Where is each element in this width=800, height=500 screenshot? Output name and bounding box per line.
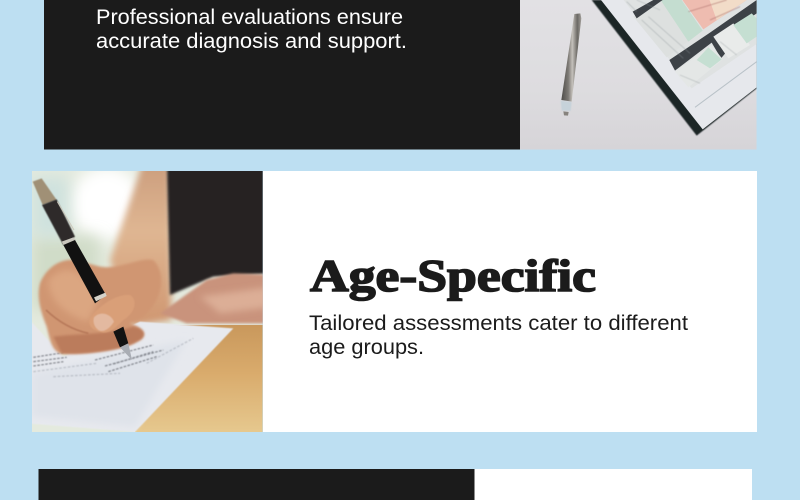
panel: age-specific (27, 150, 757, 432)
printed text lines (33, 345, 163, 372)
panel: next section, cropped (38, 469, 752, 500)
pen (33, 178, 57, 205)
white text panel (263, 171, 757, 432)
white panel (474, 469, 752, 500)
heading: Age-Specific: Age-Specific (310, 250, 596, 301)
hand (39, 259, 161, 354)
text panel: black background (44, 0, 520, 150)
body text: age-specific: Tailored assessments cater to different (309, 312, 688, 335)
panel: professional evaluations (44, 0, 760, 150)
paper sheet (27, 317, 233, 432)
black panel (38, 469, 474, 500)
body text: professional evaluations: Professional evaluations ensure (96, 6, 403, 29)
body text: age-specific: age groups. (309, 336, 424, 359)
body text: age-specific (309, 312, 688, 359)
photo: hand writing with pen (32, 171, 263, 432)
thumb (89, 295, 135, 333)
pen (561, 13, 581, 116)
body text: professional evaluations: accurate diagnosis and support. (96, 30, 407, 53)
photo: pen and binder on desk (520, 0, 760, 150)
body text: professional evaluations (96, 6, 407, 53)
